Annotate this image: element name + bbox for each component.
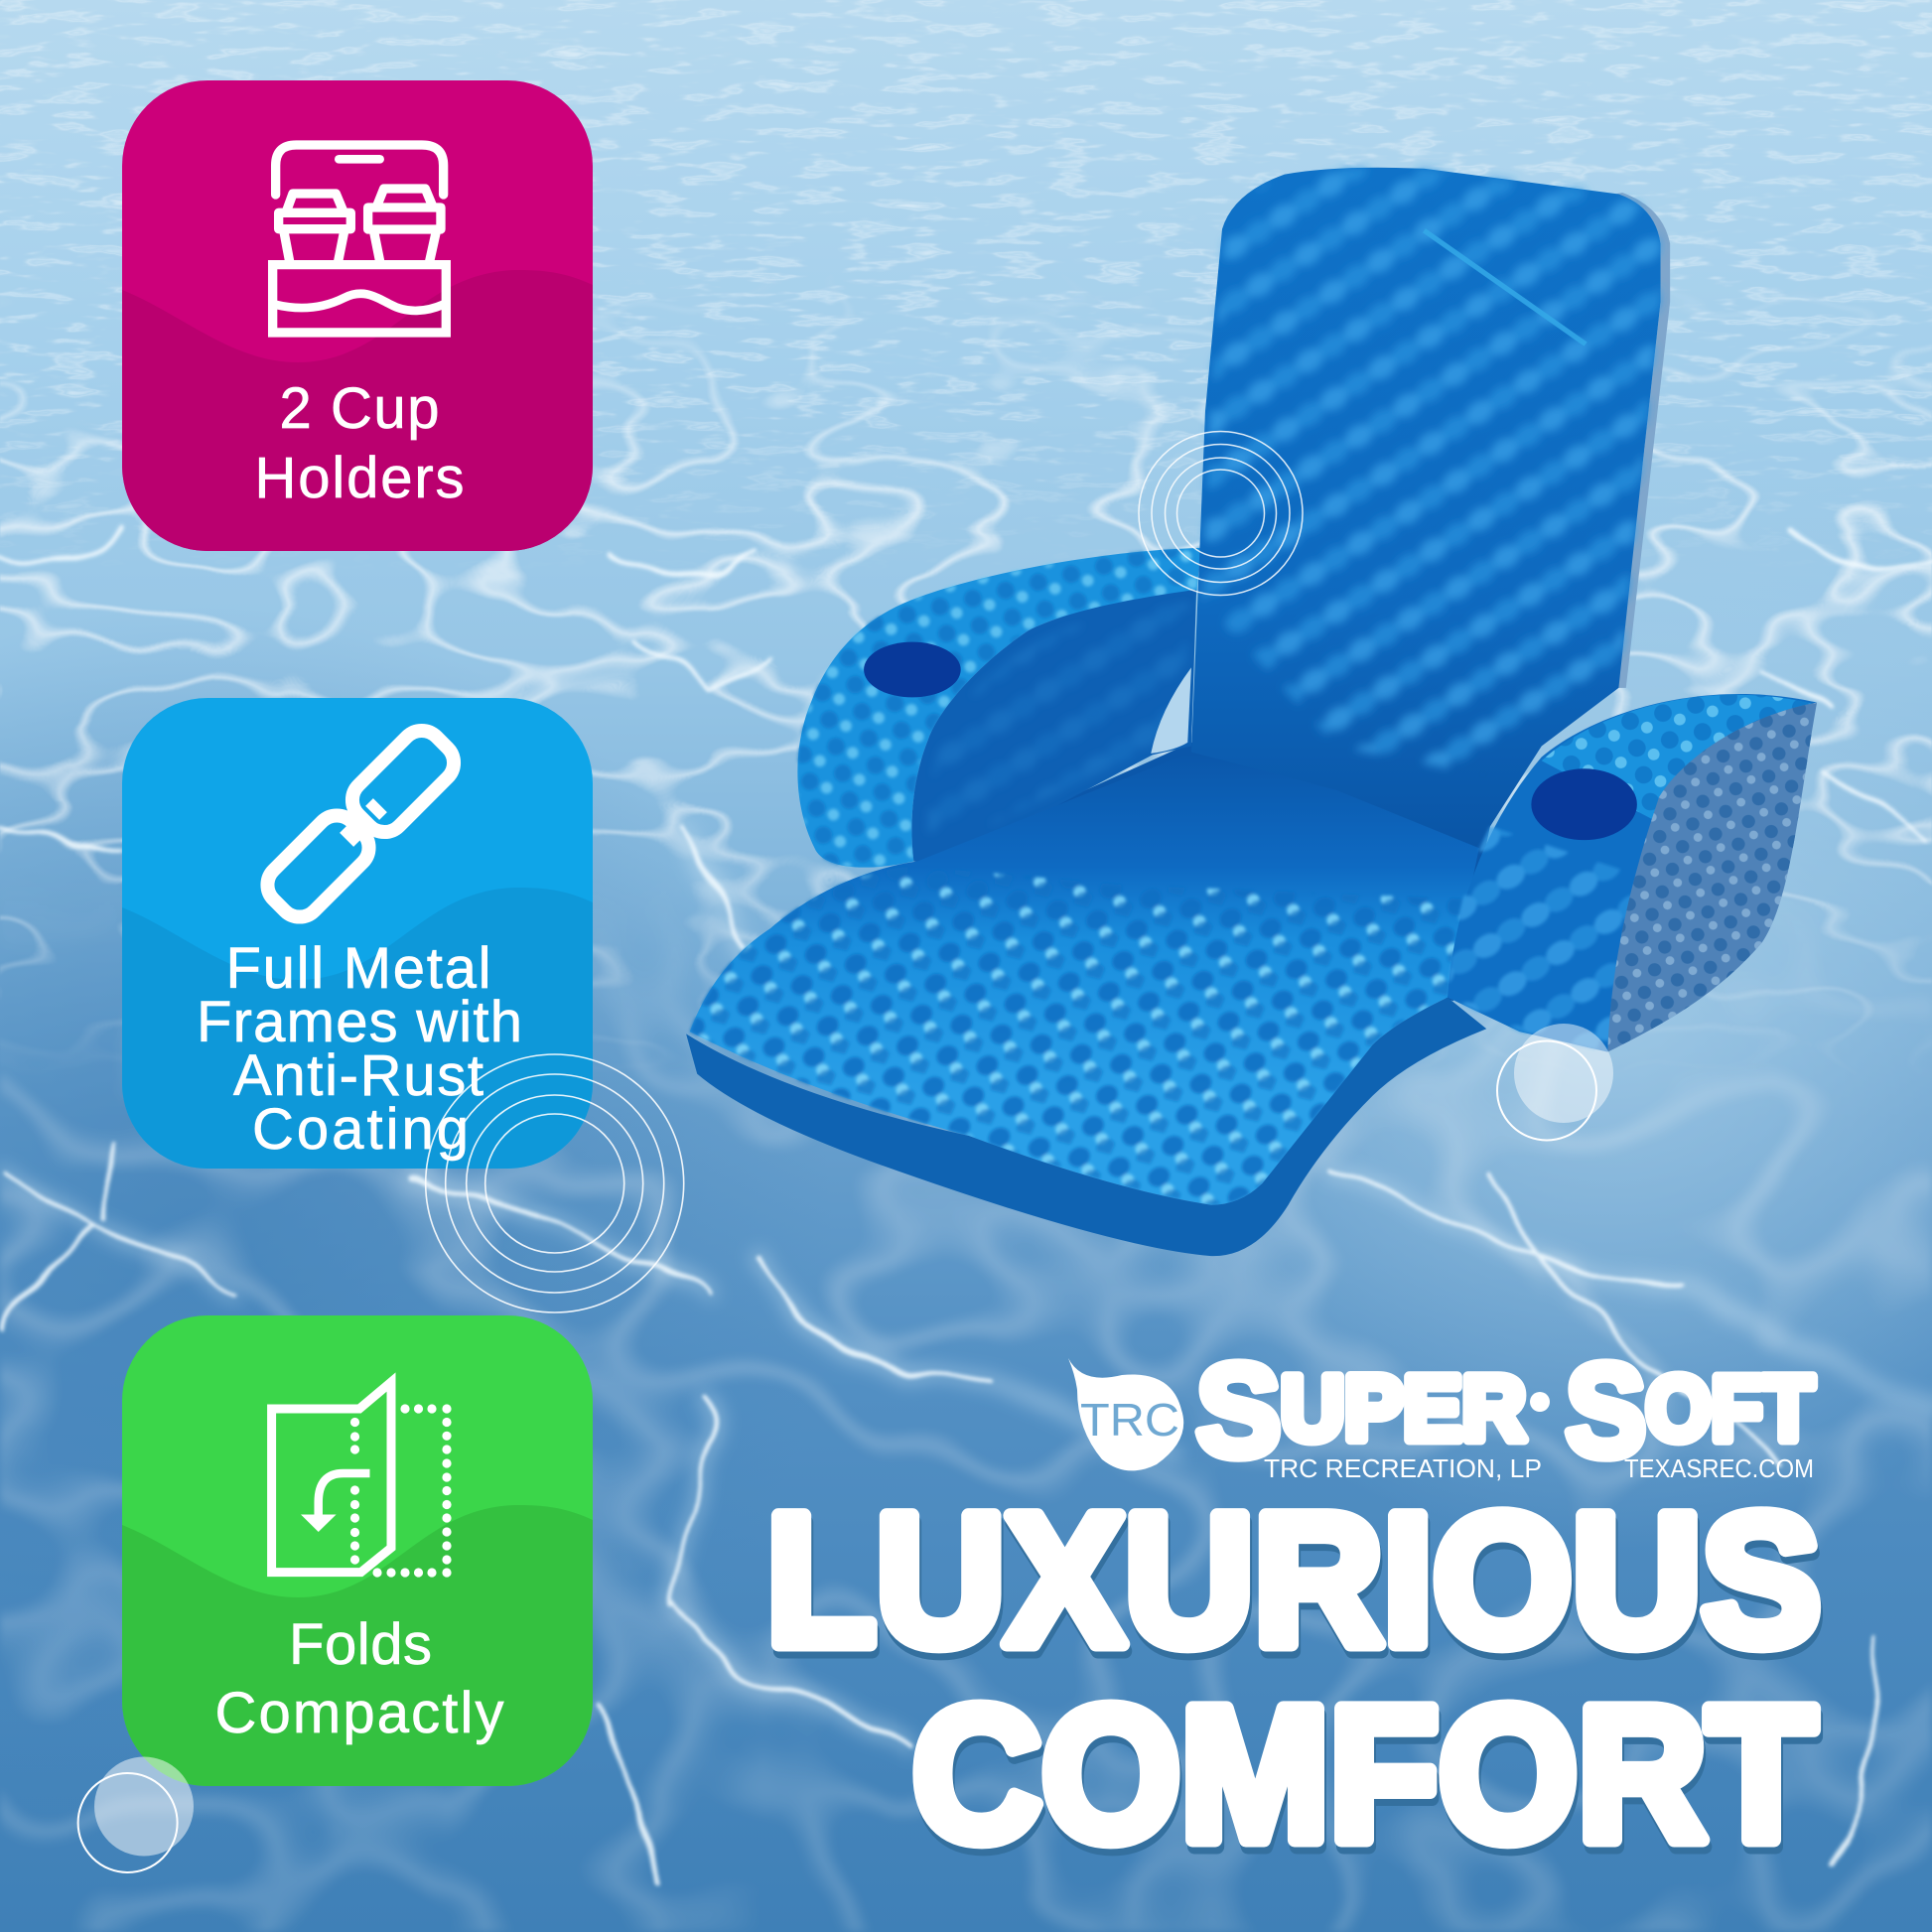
chair: left arm inner wall — [911, 590, 1196, 867]
panel wave — [122, 270, 593, 551]
product: floating lounge chair — [686, 168, 1817, 1256]
decor: rings near blue panel — [426, 1054, 684, 1312]
panel: 2 cup holders — [122, 80, 593, 551]
chair: left cup holder — [864, 642, 961, 697]
logo wordmark — [1196, 1337, 1814, 1483]
chair: right cup holder — [1531, 768, 1637, 840]
chair: gap showing water — [1151, 667, 1191, 754]
chair: seat cushion — [690, 752, 1479, 1205]
chair: backrest — [1191, 168, 1670, 848]
panel: full metal frames — [122, 698, 593, 1169]
icon: chain links — [259, 722, 463, 925]
headline: Luxurious Comfort: COMFORT — [914, 1674, 1818, 1887]
chair: right arm — [1448, 694, 1817, 1052]
label: 2 Cup Holders: Holders — [254, 446, 465, 510]
panel: folds compactly — [122, 1315, 593, 1786]
logo subline: TRC RECREATION, LP — [1264, 1453, 1542, 1483]
label: Full Metal Frames with Anti-Rust Coating: Full Metal — [226, 936, 490, 1001]
label: 2 Cup Holders: 2 Cup — [280, 376, 439, 441]
chair: left arm top surface — [797, 548, 1201, 868]
headline: Luxurious Comfort — [766, 1475, 1823, 1887]
panel wave — [122, 1505, 593, 1786]
decor: rings over chair back — [1139, 431, 1303, 596]
label: Folds Compactly: Folds — [289, 1612, 432, 1677]
headline: Luxurious Comfort: LUXURIOUS — [768, 1482, 1823, 1691]
decor: bubble lower left — [78, 1757, 194, 1872]
headline: Luxurious Comfort: COMFORT — [912, 1667, 1816, 1880]
label: Folds Compactly — [214, 1612, 504, 1745]
chair: seat front edge — [686, 998, 1486, 1256]
logo subline — [1264, 1453, 1814, 1483]
logo droplet: TRC — [1080, 1394, 1179, 1446]
panel wave — [122, 888, 593, 1169]
icon: cup carrier — [273, 145, 446, 333]
chair: inner shadow underlay — [917, 743, 1542, 1001]
logo droplet — [1068, 1358, 1183, 1470]
label: Full Metal Frames with Anti-Rust Coating: Anti-Rust — [233, 1043, 483, 1108]
logo subline: TEXASREC.COM — [1624, 1453, 1814, 1483]
headline: Luxurious Comfort: LUXURIOUS — [766, 1475, 1821, 1684]
label: Full Metal Frames with Anti-Rust Coating — [197, 936, 522, 1162]
label: Full Metal Frames with Anti-Rust Coating: Coating — [252, 1097, 469, 1162]
logo wordmark: UPER — [1281, 1358, 1526, 1459]
logo: TRC Super-Soft — [1068, 1337, 1814, 1483]
icon: folding sheet — [272, 1382, 452, 1578]
logo wordmark: OFT — [1646, 1358, 1814, 1459]
logo wordmark: S — [1196, 1337, 1281, 1483]
decor: bubble under chair — [1497, 1024, 1613, 1140]
label: Folds Compactly: Compactly — [214, 1681, 504, 1745]
chair: right arm dimpled side — [1607, 703, 1817, 1052]
logo wordmark: S — [1566, 1337, 1646, 1483]
label: 2 Cup Holders — [254, 376, 465, 510]
label: Full Metal Frames with Anti-Rust Coating: Frames with — [197, 990, 522, 1054]
